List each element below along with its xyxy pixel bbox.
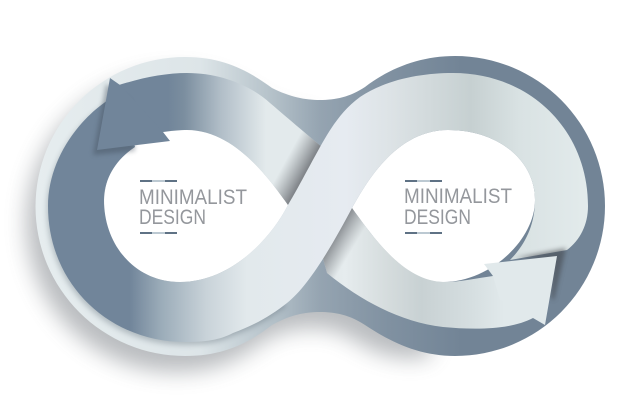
left heading line two: DESIGN (139, 206, 206, 229)
shadow of the band on the base (47, 95, 286, 345)
right heading line one: MINIMALIST (404, 185, 512, 208)
left hole (104, 130, 288, 282)
right arrowhead shadow (515, 248, 566, 300)
right label (404, 180, 512, 234)
right top rule (405, 180, 442, 182)
left top rule (140, 180, 177, 182)
main crossing band (48, 73, 588, 342)
lower right band (318, 208, 540, 329)
left heading line one: MINIMALIST (139, 186, 247, 209)
drop shadow of infinity base (27, 73, 431, 372)
infinity base plate (36, 56, 605, 356)
right bottom rule (405, 232, 442, 234)
left label (139, 180, 247, 234)
right hole (352, 130, 535, 282)
left bottom rule (140, 232, 177, 234)
upper left band (112, 73, 322, 205)
right arrowhead (484, 256, 557, 325)
right heading line two: DESIGN (404, 206, 471, 229)
left arrowhead shadow (93, 84, 135, 155)
left arrowhead (97, 78, 170, 150)
